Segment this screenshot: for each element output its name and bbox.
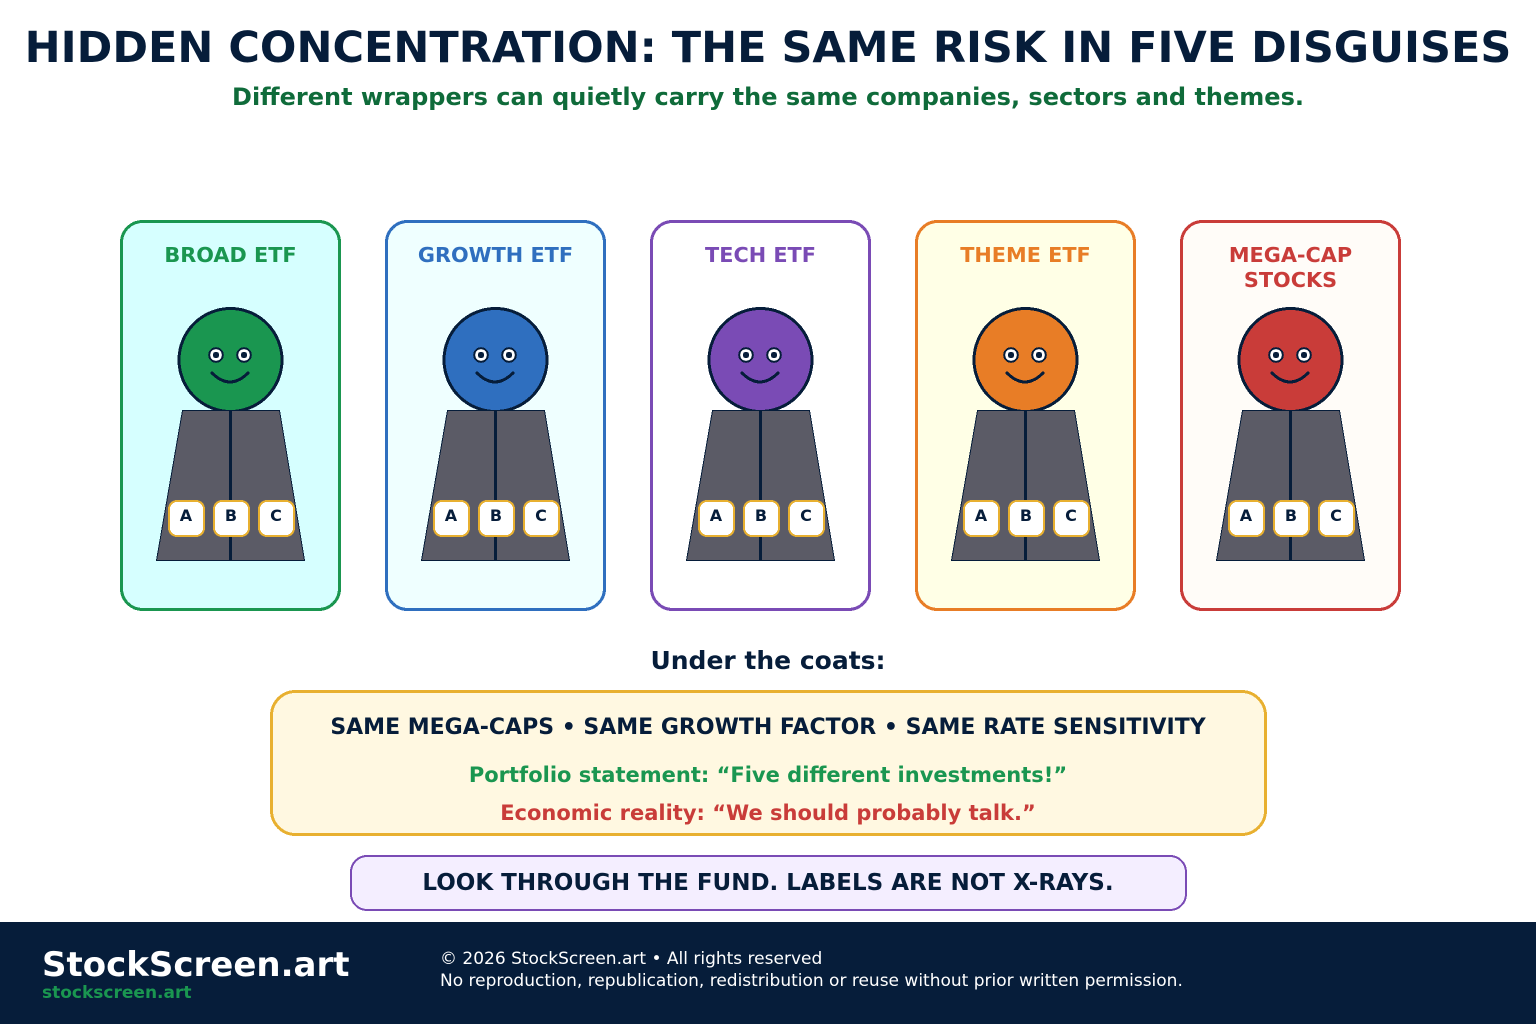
panel: growth ETF: C [535,506,547,525]
footer: No reproduction, republication, redistribution or reuse without prior written permission. [440,971,1183,991]
footer [0,922,1536,1024]
panel: shared exposures: SAME MEGA-CAPS • SAME GROWTH FACTOR • SAME RATE SENSITIVITY [330,715,1207,740]
panel: theme ETF: THEME ETF [960,243,1091,267]
panel: growth ETF: A [445,506,458,525]
panel: growth ETF: B [490,506,502,525]
title: HIDDEN CONCENTRATION: THE SAME RISK IN FIVE DISGUISES [25,23,1511,73]
panel: mega-cap stocks: STOCKS [1244,268,1337,292]
footer: © 2026 StockScreen.art • All rights reserved [440,949,822,969]
callout: LOOK THROUGH THE FUND. LABELS ARE NOT X-RAYS. [422,870,1114,896]
panel: tech ETF: B [755,506,767,525]
heading: under the coats: Under the coats: [650,646,886,675]
panel: broad ETF: BROAD ETF [164,243,297,267]
panel: theme ETF: C [1065,506,1077,525]
panel: shared exposures: Economic reality: “We should probably talk.” [500,801,1036,825]
panel: tech ETF: C [800,506,812,525]
callout [351,856,1186,910]
panel: theme ETF [916,222,1134,610]
panel: tech ETF: TECH ETF [705,243,816,267]
panel: shared exposures [272,692,1266,834]
footer: stockscreen.art [42,983,192,1003]
subtitle: Different wrappers can quietly carry the same companies, sectors and themes. [232,83,1304,111]
panel: mega-cap stocks: C [1330,506,1342,525]
panel: mega-cap stocks: B [1285,506,1297,525]
panel: growth ETF: GROWTH ETF [418,243,573,267]
panel: mega-cap stocks: MEGA-CAP [1229,243,1352,267]
panel: shared exposures: Portfolio statement: “Five different investments!” [469,763,1067,787]
footer: StockScreen.art [42,945,349,985]
panel: theme ETF: B [1020,506,1032,525]
panel: broad ETF: B [225,506,237,525]
panel: theme ETF: A [975,506,988,525]
panel: tech ETF: A [710,506,723,525]
panel: broad ETF [122,222,340,610]
panel: growth ETF [386,222,604,610]
panel: broad ETF: C [270,506,282,525]
panel: mega-cap stocks [1182,222,1400,610]
panel: tech ETF [652,222,870,610]
panel: mega-cap stocks: A [1240,506,1253,525]
panel: broad ETF: A [180,506,193,525]
